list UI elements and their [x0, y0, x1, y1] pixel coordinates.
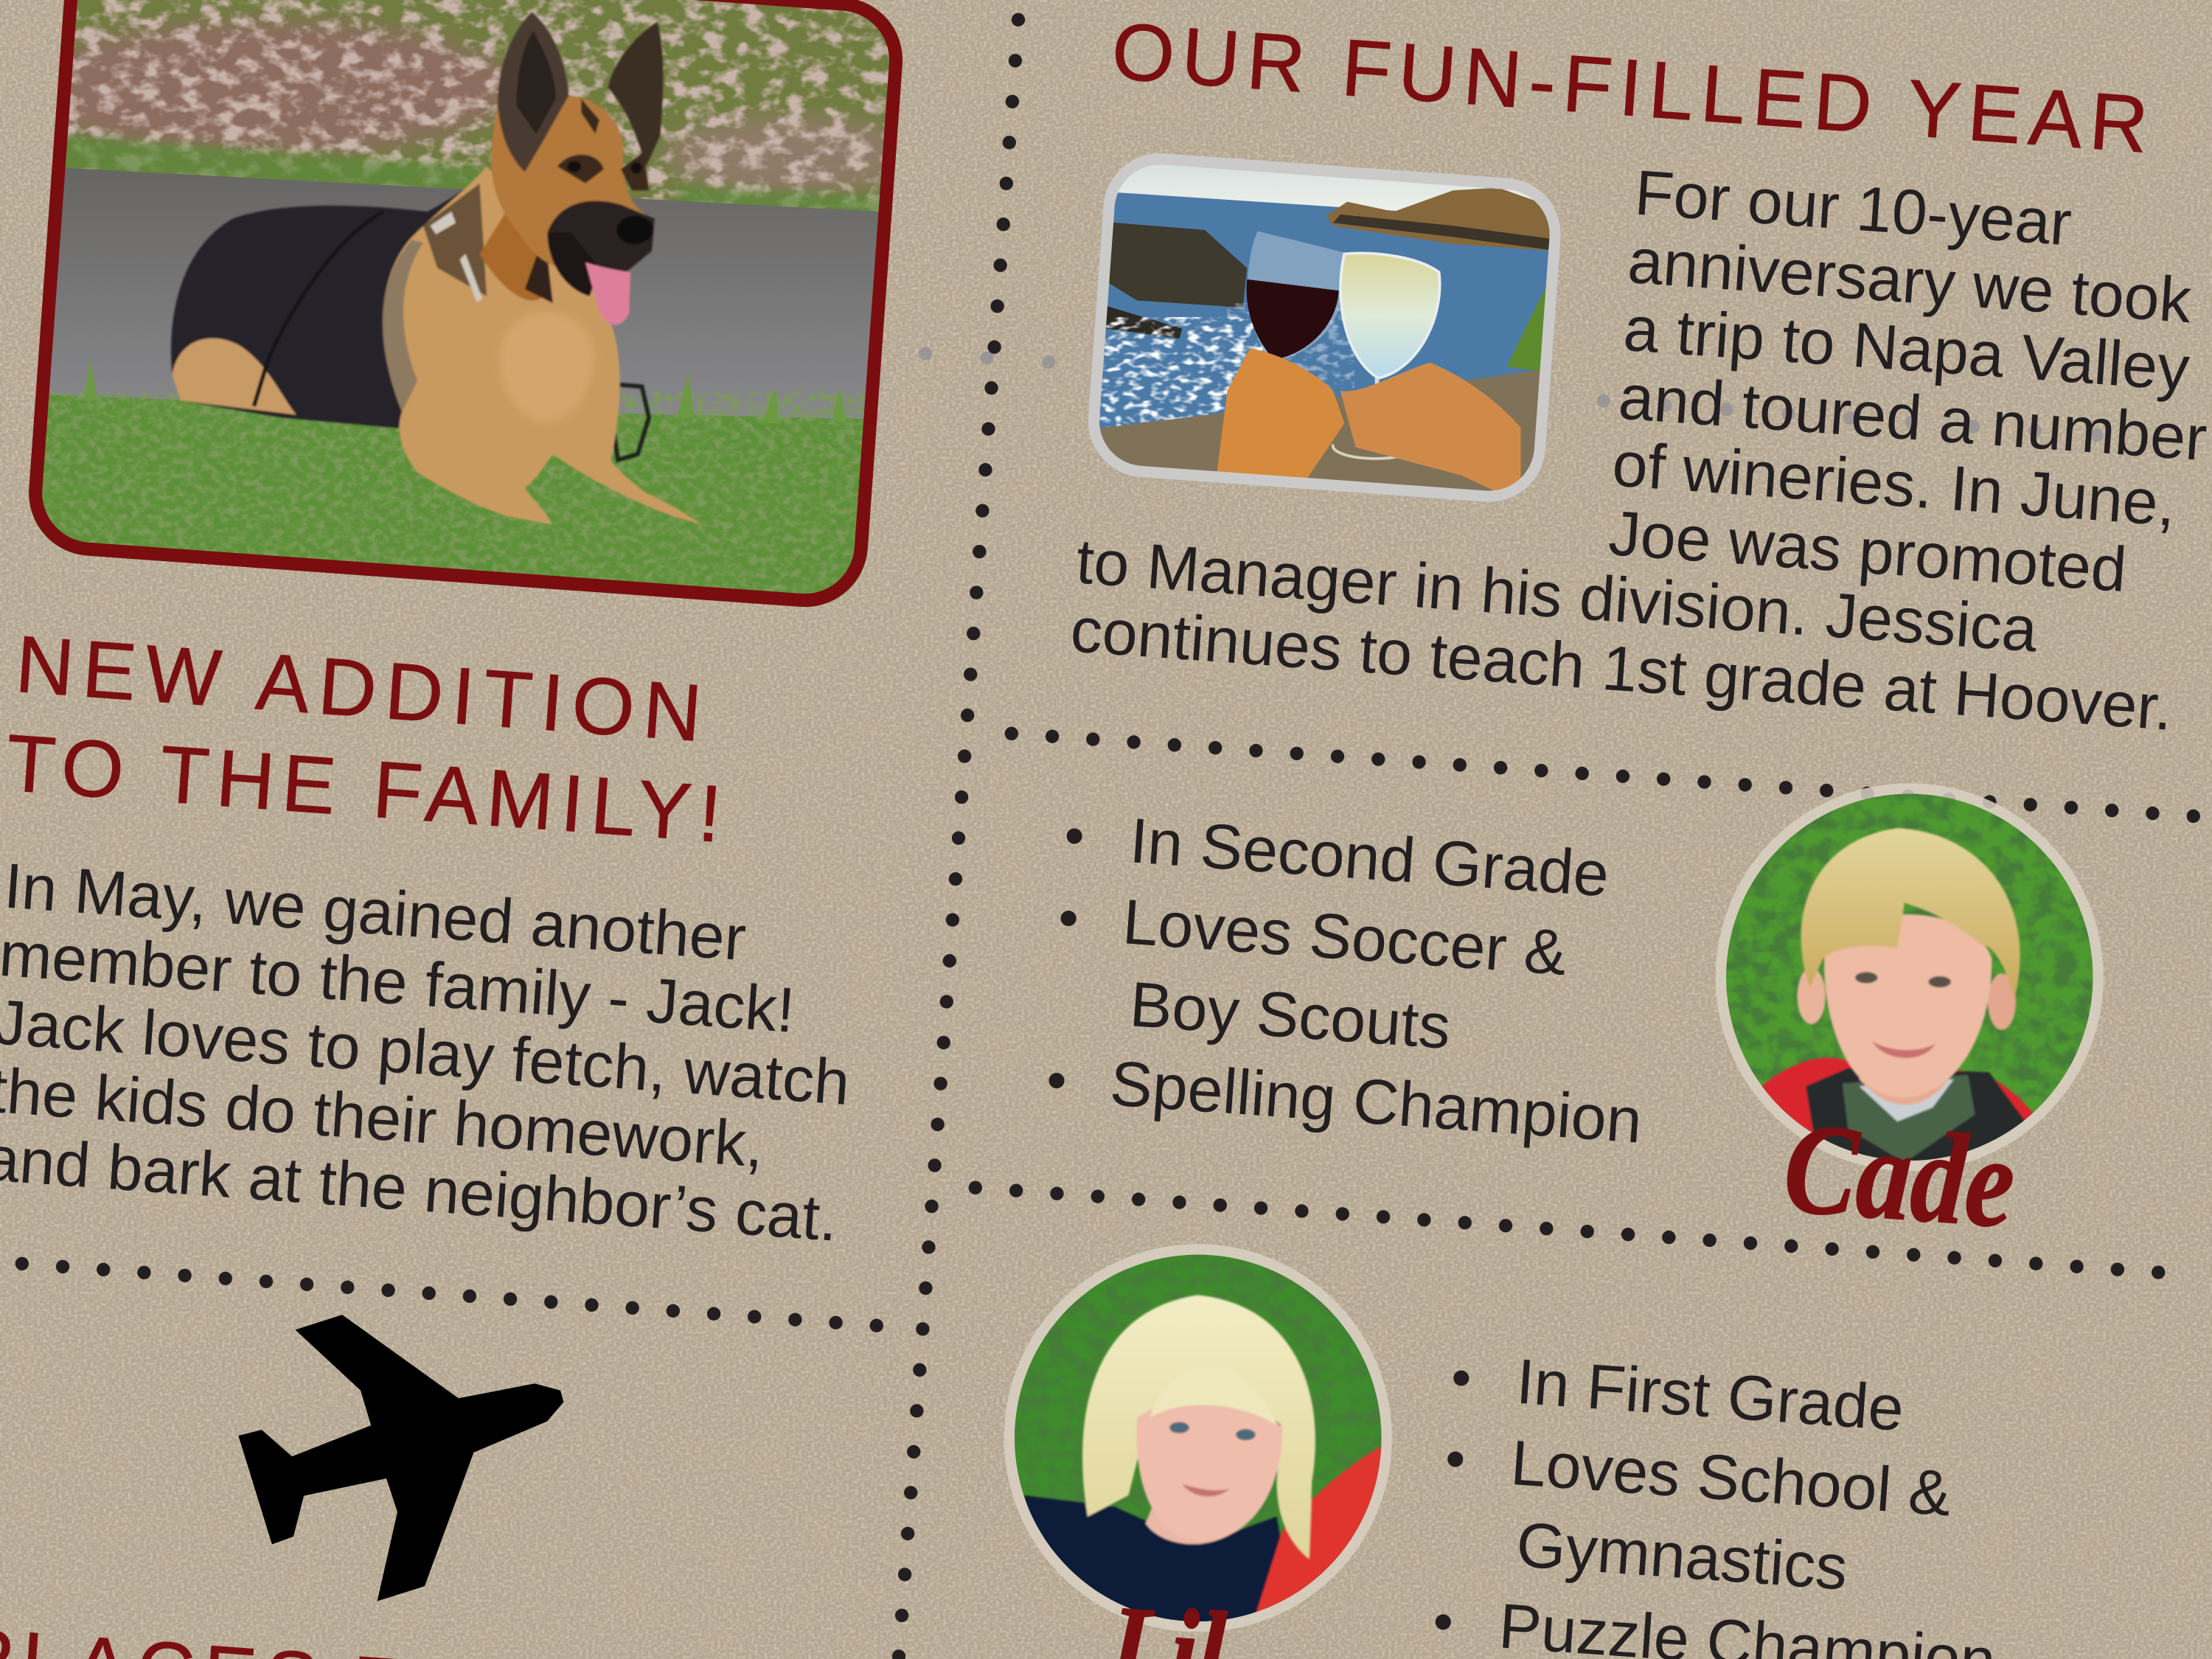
photo: German shepherd dog [29, 0, 902, 608]
text block: fun-filled year: Joe was promoted [1607, 498, 2129, 605]
list: Cade facts: Loves Soccer & [1121, 886, 1569, 989]
list: Cade facts: Boy Scouts [1127, 969, 1453, 1062]
photo: wine toast [1088, 153, 1561, 502]
dotted divider: between Cade and Lil [975, 1188, 2160, 1273]
text block: fun-filled year: to Manager in his division. Jessica [1074, 526, 2039, 666]
text block: new addition: member to the family - Jack! [0, 919, 797, 1046]
heading: our fun-filled year: OUR FUN-FILLED YEAR [1109, 6, 2151, 170]
list: Lil facts: Loves School & [1509, 1427, 1953, 1529]
text block: fun-filled year: a trip to Napa Valley [1621, 293, 2192, 404]
faint dotted row behind photos [925, 354, 2098, 435]
list: Lil facts [1436, 1346, 1998, 1659]
text block: new addition: Jack loves to play fetch, watch [0, 987, 852, 1119]
photo: Lil portrait [1001, 1242, 1397, 1636]
text block: fun-filled year: continues to teach 1st grade at Hoover. [1068, 594, 2175, 744]
dotted divider: left column [22, 1264, 877, 1326]
list: Lil facts: In First Grade [1514, 1346, 1906, 1444]
heading: new addition [3, 619, 724, 860]
text block: new addition [0, 850, 852, 1255]
list: Cade facts: Spelling Champion [1107, 1048, 1644, 1157]
list: Cade facts [1049, 805, 1644, 1157]
list: Lil facts: Gymnastics [1514, 1509, 1850, 1604]
text block: new addition: In May, we gained another [1, 850, 748, 974]
text block: fun-filled year: and toured a number [1616, 361, 2209, 474]
name: Cade: Cade [1780, 1096, 2020, 1256]
text block: new addition: the kids do their homework, [0, 1055, 766, 1181]
dotted divider: vertical column [899, 20, 1018, 1659]
text block: fun-filled year: anniversary we took [1626, 226, 2194, 336]
text block: fun-filled year [1068, 157, 2209, 744]
text block: fun-filled year: For our 10-year [1632, 157, 2074, 260]
photo: Cade portrait [1714, 783, 2109, 1185]
dotted divider: under fun-filled year [1012, 734, 2195, 816]
text block: fun-filled year: of wineries. In June, [1610, 428, 2178, 540]
heading: new addition: NEW ADDITION [13, 619, 705, 759]
icon: airplane [238, 1315, 563, 1601]
heading: new addition: TO THE FAMILY! [3, 718, 724, 860]
text block: new addition: and bark at the neighbor’s cat. [0, 1123, 840, 1255]
list: Cade facts: In Second Grade [1127, 805, 1611, 910]
